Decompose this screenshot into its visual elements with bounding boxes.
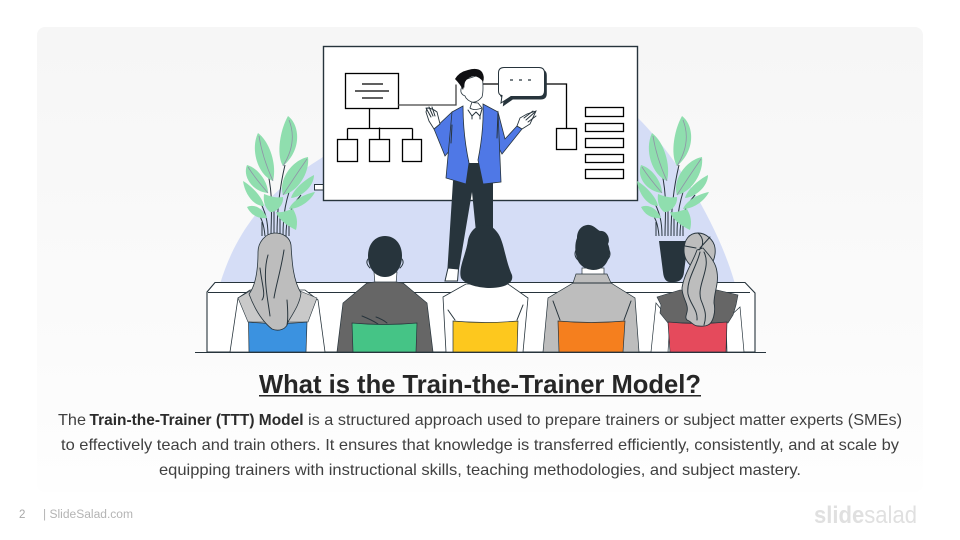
org chart on board: [338, 74, 456, 162]
right side diagram on board: [466, 84, 624, 178]
shirt: [466, 106, 484, 163]
person 5: ponytail and red chair: [651, 233, 744, 352]
logo wordmark: slidesalad: [814, 502, 917, 529]
face: [461, 74, 483, 110]
title: What is the Train-the-Trainer Model?: [259, 369, 701, 399]
trousers: [448, 160, 493, 269]
presentation board: [314, 46, 638, 200]
body text: to effectively teach and train others. It ensures that knowledge is transferred efficiently, consistently, and at scale by: [61, 437, 899, 454]
bench: [207, 282, 755, 352]
body text: equipping trainers with instructional skills, teaching methodologies, and subject mastery.: [159, 462, 801, 479]
floor line: [195, 352, 766, 354]
body text: [58, 412, 902, 479]
illustration: trainer presenting to audience: [195, 46, 766, 352]
presenter: [426, 69, 536, 281]
shoe: [445, 268, 458, 281]
page number: 2: [19, 509, 25, 521]
blue semicircle backdrop: [220, 118, 735, 284]
left hand: [426, 107, 440, 129]
jacket: [434, 104, 522, 184]
plant right with pot: [637, 116, 709, 282]
body text: The: [58, 412, 86, 429]
person 1: hijab and blue chair: [230, 233, 325, 352]
right hand: [517, 111, 536, 129]
person 2: dark jacket and green chair: [337, 236, 433, 352]
plant left: [243, 116, 315, 236]
person 3: long dark hair and yellow chair: [443, 225, 528, 352]
background panel: [37, 27, 923, 492]
icon: speech bubble: [498, 68, 547, 106]
body text: Train-the-Trainer (TTT) Model: [90, 412, 304, 429]
person 4: grey jacket and orange chair: [543, 225, 639, 352]
hair: [455, 69, 484, 90]
collar: [468, 109, 482, 119]
body text: is a structured approach used to prepare trainers or subject matter experts (SMEs): [308, 412, 902, 429]
footer site name: | SlideSalad.com: [43, 509, 133, 521]
